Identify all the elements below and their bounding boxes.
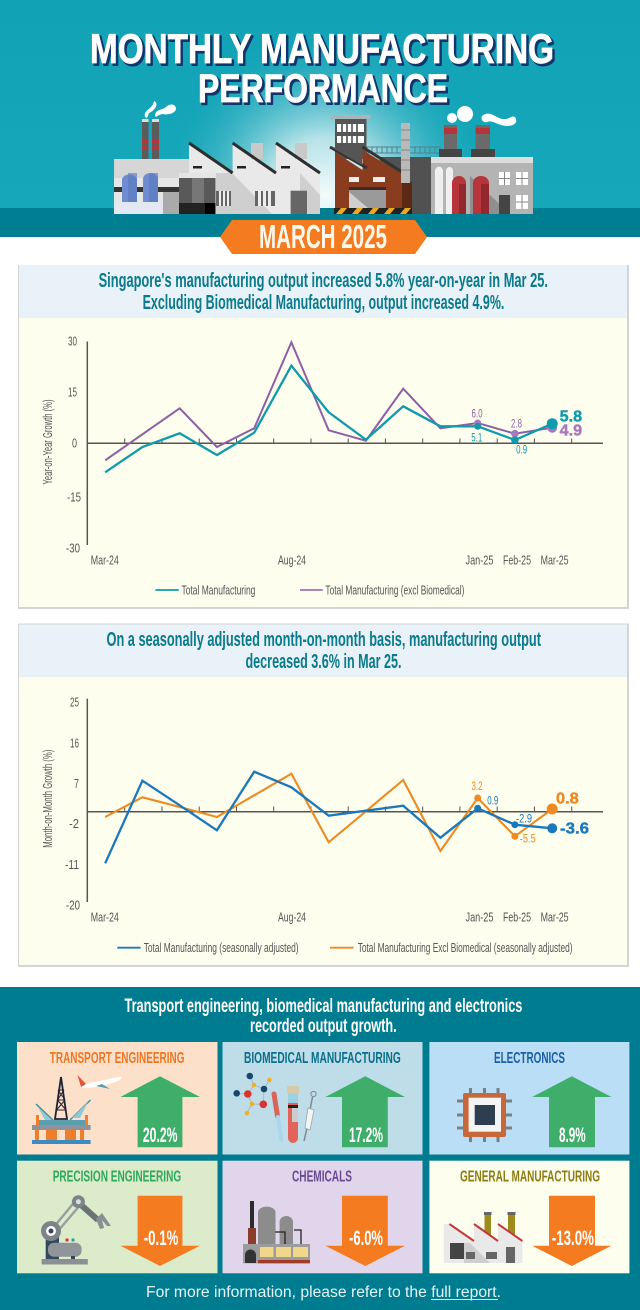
icon: small factory [444,1212,522,1263]
heading: year-on-year [99,270,548,314]
data points and values: -3.6 [560,820,589,838]
axes [87,342,603,545]
x axis labels: Mar-25 [541,910,569,924]
icon: oil rig and plane [32,1075,122,1144]
heading: month-on-month [106,629,541,673]
month banner: MARCH 2025 [259,218,387,255]
middle plant [331,115,371,119]
arrow: up 8.9%: 8.9% [559,1124,586,1147]
x axis labels: Mar-24 [91,910,119,924]
y axis labels [66,334,81,556]
sector heading: recorded output growth. [250,1015,397,1037]
x axis labels [91,910,569,924]
icon: robot arm [41,1195,111,1264]
y axis labels: 16 [70,736,79,750]
card: precision engineering: PRECISION ENGINEERING [53,1168,181,1186]
right plant [447,113,457,123]
card: electronics [429,1042,629,1154]
illustration: factories [114,101,533,214]
arrow: up 20.2% [120,1076,200,1147]
y axis labels [65,696,80,912]
legend [155,584,464,598]
icon: molecules and lab tools [233,1073,316,1143]
data points and values: 2.8 [511,416,522,430]
line: total manufacturing [105,366,552,472]
y axis labels: -30 [66,542,80,556]
arrow: down -6.0% [325,1196,405,1266]
arrow: up 20.2%: 20.2% [143,1124,178,1147]
data points and values [472,779,589,846]
data points and values: 5.8 [560,408,582,426]
title [90,25,556,113]
x axis labels: Mar-25 [541,554,569,568]
left plant [145,101,176,118]
card: transport engineering: TRANSPORT ENGINEERING [50,1050,184,1067]
panel: sectors [0,987,640,1310]
y axis labels: 0 [72,436,77,450]
data points and values: -5.5 [520,832,536,846]
y axis labels: 25 [70,696,79,710]
arrow: down -6.0%: -6.0% [349,1227,383,1250]
y axis title: Month-on-Month Growth (%) [41,750,55,848]
data points and values: 0.9 [516,442,527,456]
y axis labels: -15 [67,490,81,504]
icon: chemical plant [243,1201,310,1263]
title: PERFORMANCE [198,67,448,111]
y axis labels: -20 [66,898,80,912]
sector heading [124,995,522,1037]
arrow: up 8.9% [532,1076,611,1147]
legend: Total Manufacturing [182,584,255,598]
sawtooth building [189,143,320,214]
arrow: down -13.0% [532,1196,611,1266]
panel: month-on-month chart [18,624,629,967]
legend: Total Manufacturing (seasonally adjusted) [144,941,299,955]
card: biomedical manufacturing [222,1042,422,1154]
arrow: up 17.2%: 17.2% [349,1124,383,1147]
x axis labels: Aug-24 [278,554,306,568]
month banner [220,218,427,255]
card: general manufacturing [429,1161,629,1273]
card: precision engineering [17,1161,218,1273]
card: electronics: ELECTRONICS [494,1050,565,1067]
y axis labels: 7 [74,777,79,791]
data points and values: 5.1 [471,430,483,444]
legend: Total Manufacturing (excl Biomedical) [325,584,464,598]
data points and values: 0.8 [556,790,579,808]
y axis title: Year-on-Year Growth (%) [41,400,55,484]
arrow: down -0.1% [120,1196,200,1266]
axes [87,699,603,902]
arrow: down -13.0%: -13.0% [552,1227,594,1250]
heading: month-on-month: decreased 3.6% in Mar 25. [246,651,402,673]
x axis labels: Jan-25 [466,910,494,924]
x axis labels: Feb-25 [503,910,531,924]
legend [117,941,573,955]
x axis labels: Jan-25 [466,554,494,568]
data points and values: 6.0 [472,406,483,420]
data points and values [471,406,582,456]
y axis labels: 15 [68,386,77,400]
footer note: For more information, please refer to the full report. [146,1284,501,1301]
y axis labels: -2 [69,817,79,831]
title: PERFORMANCE [200,69,450,113]
icon: microchip [457,1088,512,1142]
card: chemicals [222,1161,422,1273]
arrow: up 17.2% [325,1076,405,1147]
data points and values: 3.2 [472,779,483,793]
card: chemicals: CHEMICALS [292,1168,352,1186]
y axis labels: -11 [65,858,79,872]
x axis labels: Aug-24 [278,910,306,924]
header banner [0,0,640,237]
data points and values: 0.9 [487,794,499,808]
card: biomedical manufacturing: BIOMEDICAL MANUFACTURING [244,1050,401,1067]
line: total manufacturing excl biomedical [105,342,552,460]
data points and values: -2.9 [516,812,532,826]
line: total manufacturing seasonally adjusted [105,772,552,863]
line: total manufacturing excl biomedical seasonally adjusted [105,774,552,851]
x axis labels: Feb-25 [503,554,531,568]
x axis labels: Mar-24 [91,554,119,568]
arrow: down -0.1%: -0.1% [144,1227,179,1250]
panel: year-on-year chart [18,265,629,609]
data points and values: 4.9 [560,422,582,440]
x axis labels [91,554,569,568]
card: transport engineering [17,1042,218,1154]
y axis labels: 30 [68,334,77,348]
